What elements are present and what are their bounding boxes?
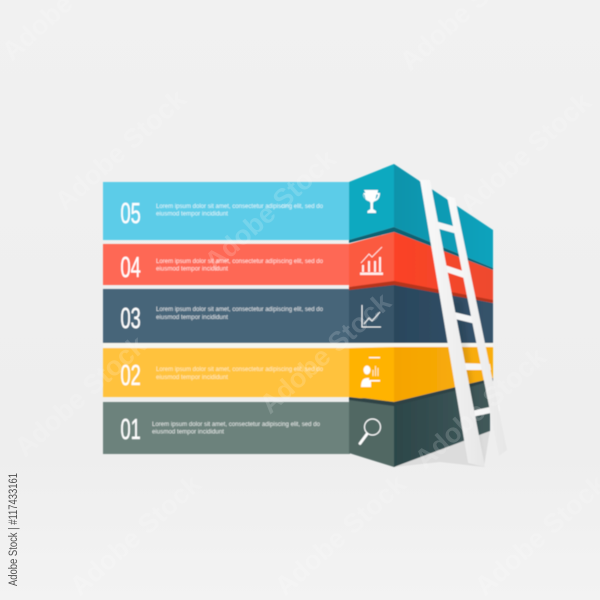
number 01: 01 [120, 414, 141, 446]
bar 05 [103, 182, 350, 240]
side face 04 [394, 232, 493, 301]
number 04: 04 [120, 252, 141, 284]
side face 03 [394, 283, 493, 344]
front face 03 [349, 283, 394, 343]
panel 04 [103, 227, 493, 301]
text 04: Lorem ipsum dolor sit amet, consectetur adipiscing elit, sed do [156, 258, 323, 265]
front face 05 [349, 164, 394, 240]
floor shadow [394, 430, 490, 467]
panel 03 [103, 281, 493, 344]
text 05: eiusmod tempor incididunt [156, 210, 228, 218]
watermarks: Adobe Stock [454, 86, 597, 219]
watermarks: Adobe Stock [199, 143, 342, 276]
bar 01 [103, 402, 350, 454]
text 02: Lorem ipsum dolor sit amet, consectetur adipiscing elit, sed do [156, 366, 323, 373]
text 04: eiusmod tempor incididunt [156, 266, 228, 272]
icon: line chart [362, 305, 381, 327]
credit text: Adobe Stock | #117433161 [8, 473, 20, 586]
bar 03 [103, 289, 350, 343]
text 05: Lorem ipsum dolor sit amet, consectetur adipiscing elit, sed do [156, 203, 323, 210]
front face 02 [349, 347, 394, 402]
text 01: eiusmod tempor incididunt [152, 428, 224, 436]
panel 02 [103, 347, 493, 402]
icon: magnifier [360, 419, 380, 444]
panel 05 [103, 164, 493, 268]
top shadow 01 [349, 378, 493, 406]
watermarks: Adobe Stock [64, 468, 207, 600]
number 05: 05 [120, 198, 141, 230]
side face 02 [394, 347, 493, 402]
watermarks: Adobe Stock [269, 468, 412, 600]
number 03: 03 [120, 303, 141, 335]
number 02: 02 [120, 360, 141, 392]
divider 03-02 [103, 343, 493, 348]
text 03: Lorem ipsum dolor sit amet, consectetur adipiscing elit, sed do [156, 306, 323, 313]
front face 04 [349, 232, 394, 287]
watermarks: Adobe Stock [49, 83, 192, 216]
side face 01 [394, 382, 490, 467]
right rail [447, 196, 507, 456]
ladder [420, 180, 507, 467]
left rail [420, 180, 485, 467]
bar 02 [103, 348, 350, 397]
top shadow 03 [349, 281, 493, 303]
icon: bar chart growth [360, 247, 383, 275]
watermarks: Adobe Stock [254, 286, 397, 419]
text 01: Lorem ipsum dolor sit amet, consectetur adipiscing elit, sed do [152, 421, 320, 428]
bar 04 [103, 244, 350, 285]
watermarks: Adobe Stock [9, 329, 152, 462]
front face 01 [349, 398, 394, 467]
panel 01 [103, 378, 493, 467]
icon: presenter [361, 357, 380, 387]
icon: trophy [363, 190, 380, 213]
text 02: eiusmod tempor incididunt [156, 374, 228, 381]
ladder rungs [435, 221, 500, 417]
text 03: eiusmod tempor incididunt [156, 314, 228, 321]
ladder shadow [452, 300, 482, 462]
side face 05 [394, 164, 493, 268]
top shadow 04 [349, 227, 493, 270]
watermarks: Adobe Stock [409, 341, 552, 474]
